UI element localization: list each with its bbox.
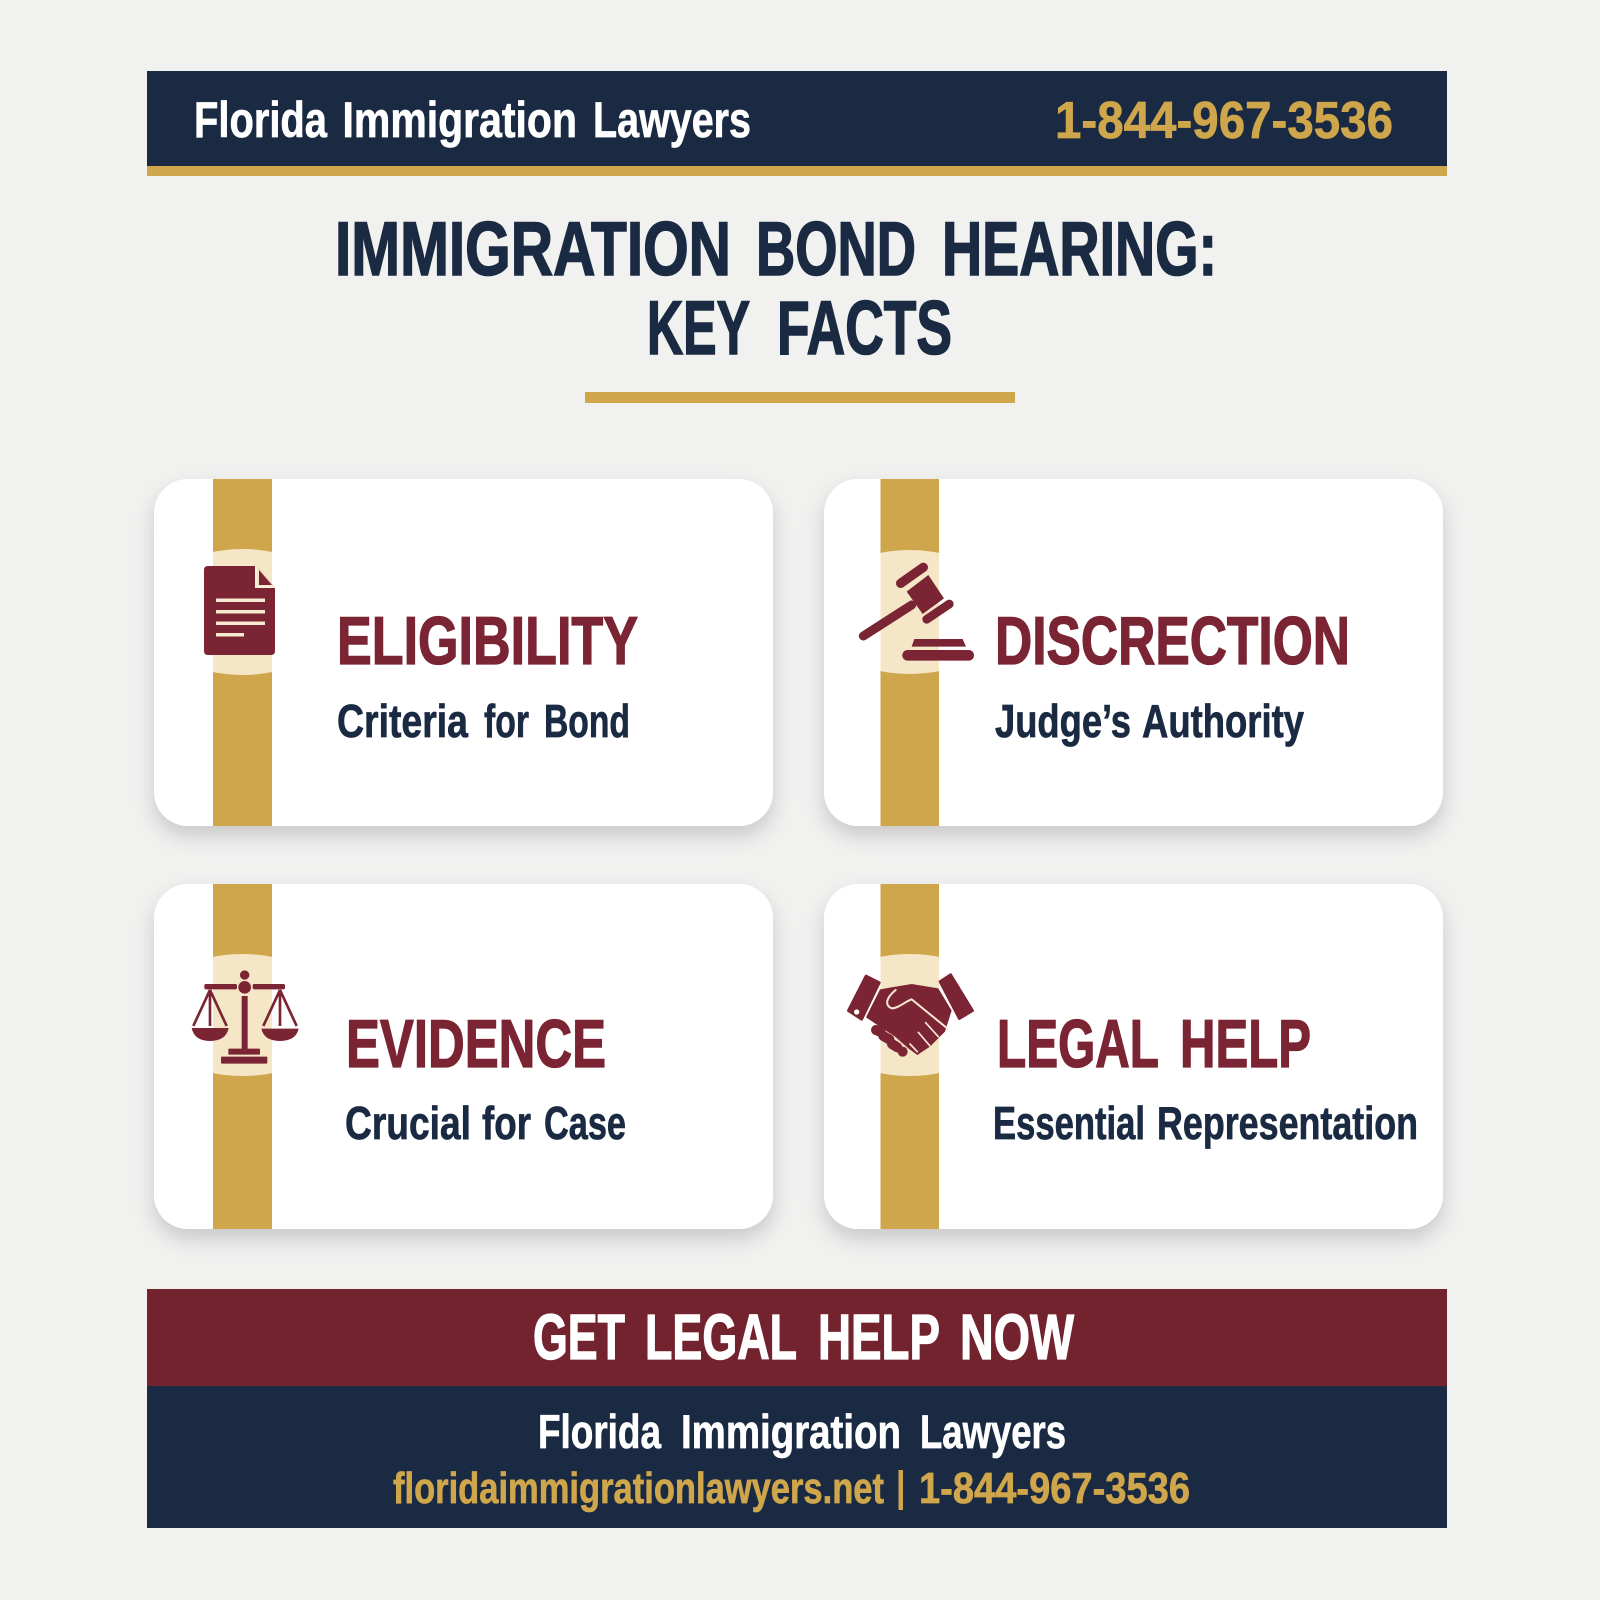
subheading: criteria: Criteria <box>337 695 468 747</box>
firm name: Immigration <box>681 1405 901 1458</box>
panel: legal help <box>813 884 1443 1229</box>
contact details: 1-844-967-3536 <box>919 1464 1190 1513</box>
firm name: Florida <box>538 1405 662 1458</box>
heading: evidence: EVIDENCE <box>346 1006 606 1082</box>
heading: eligibility: ELIGIBILITY <box>337 603 638 679</box>
heading: discrection: DISCRECTION <box>995 603 1350 679</box>
subheading: crucial: Case <box>544 1097 626 1149</box>
subheading: representation: Representation <box>1157 1097 1418 1149</box>
call to action: GET <box>533 1301 625 1373</box>
panel: discretion <box>813 479 1443 826</box>
subheading: criteria <box>337 695 630 747</box>
icon: gavel <box>863 567 969 655</box>
firm name: Immigration <box>342 92 577 148</box>
subheading: crucial: Crucial <box>345 1097 471 1149</box>
call to action <box>533 1301 1074 1373</box>
firm name <box>538 1405 1066 1458</box>
heading: legal help: HELP <box>1180 1006 1311 1082</box>
title: IMMIGRATION <box>335 207 731 292</box>
title: FACTS <box>777 286 952 371</box>
subheading: authority <box>995 695 1304 747</box>
call to action: HELP <box>818 1301 940 1373</box>
subheading: representation <box>993 1097 1418 1149</box>
title: BOND <box>756 207 916 292</box>
firm name: Lawyers <box>920 1405 1066 1458</box>
call to action: NOW <box>960 1301 1074 1373</box>
phone number: 1-844-967-3536 <box>1055 92 1393 150</box>
subheading: criteria: for <box>484 695 529 747</box>
call to action: LEGAL <box>645 1301 797 1373</box>
contact details: floridaimmigrationlawyers.net <box>393 1464 884 1513</box>
subheading: criteria: Bond <box>544 695 630 747</box>
footer banner <box>147 1289 1447 1528</box>
subheading: authority: Authority <box>1142 695 1304 747</box>
title: KEY <box>647 286 750 371</box>
header bar <box>147 71 1447 176</box>
panel: evidence <box>146 884 773 1229</box>
firm name <box>194 92 751 148</box>
subheading: crucial: for <box>482 1097 531 1149</box>
title underline <box>585 392 1015 403</box>
title <box>335 207 1217 371</box>
firm name: Florida <box>194 92 328 148</box>
firm name: Lawyers <box>593 92 751 148</box>
subheading: representation: Essential <box>993 1097 1145 1149</box>
icon: handshake <box>848 975 973 1057</box>
icon: document <box>204 566 275 655</box>
subheading: authority: Judge’s <box>995 695 1131 747</box>
icon: scales <box>192 970 299 1064</box>
heading: legal help: LEGAL <box>997 1006 1159 1082</box>
subheading: crucial <box>345 1097 626 1149</box>
title: HEARING: <box>942 207 1217 292</box>
panel: eligibility <box>146 479 773 826</box>
